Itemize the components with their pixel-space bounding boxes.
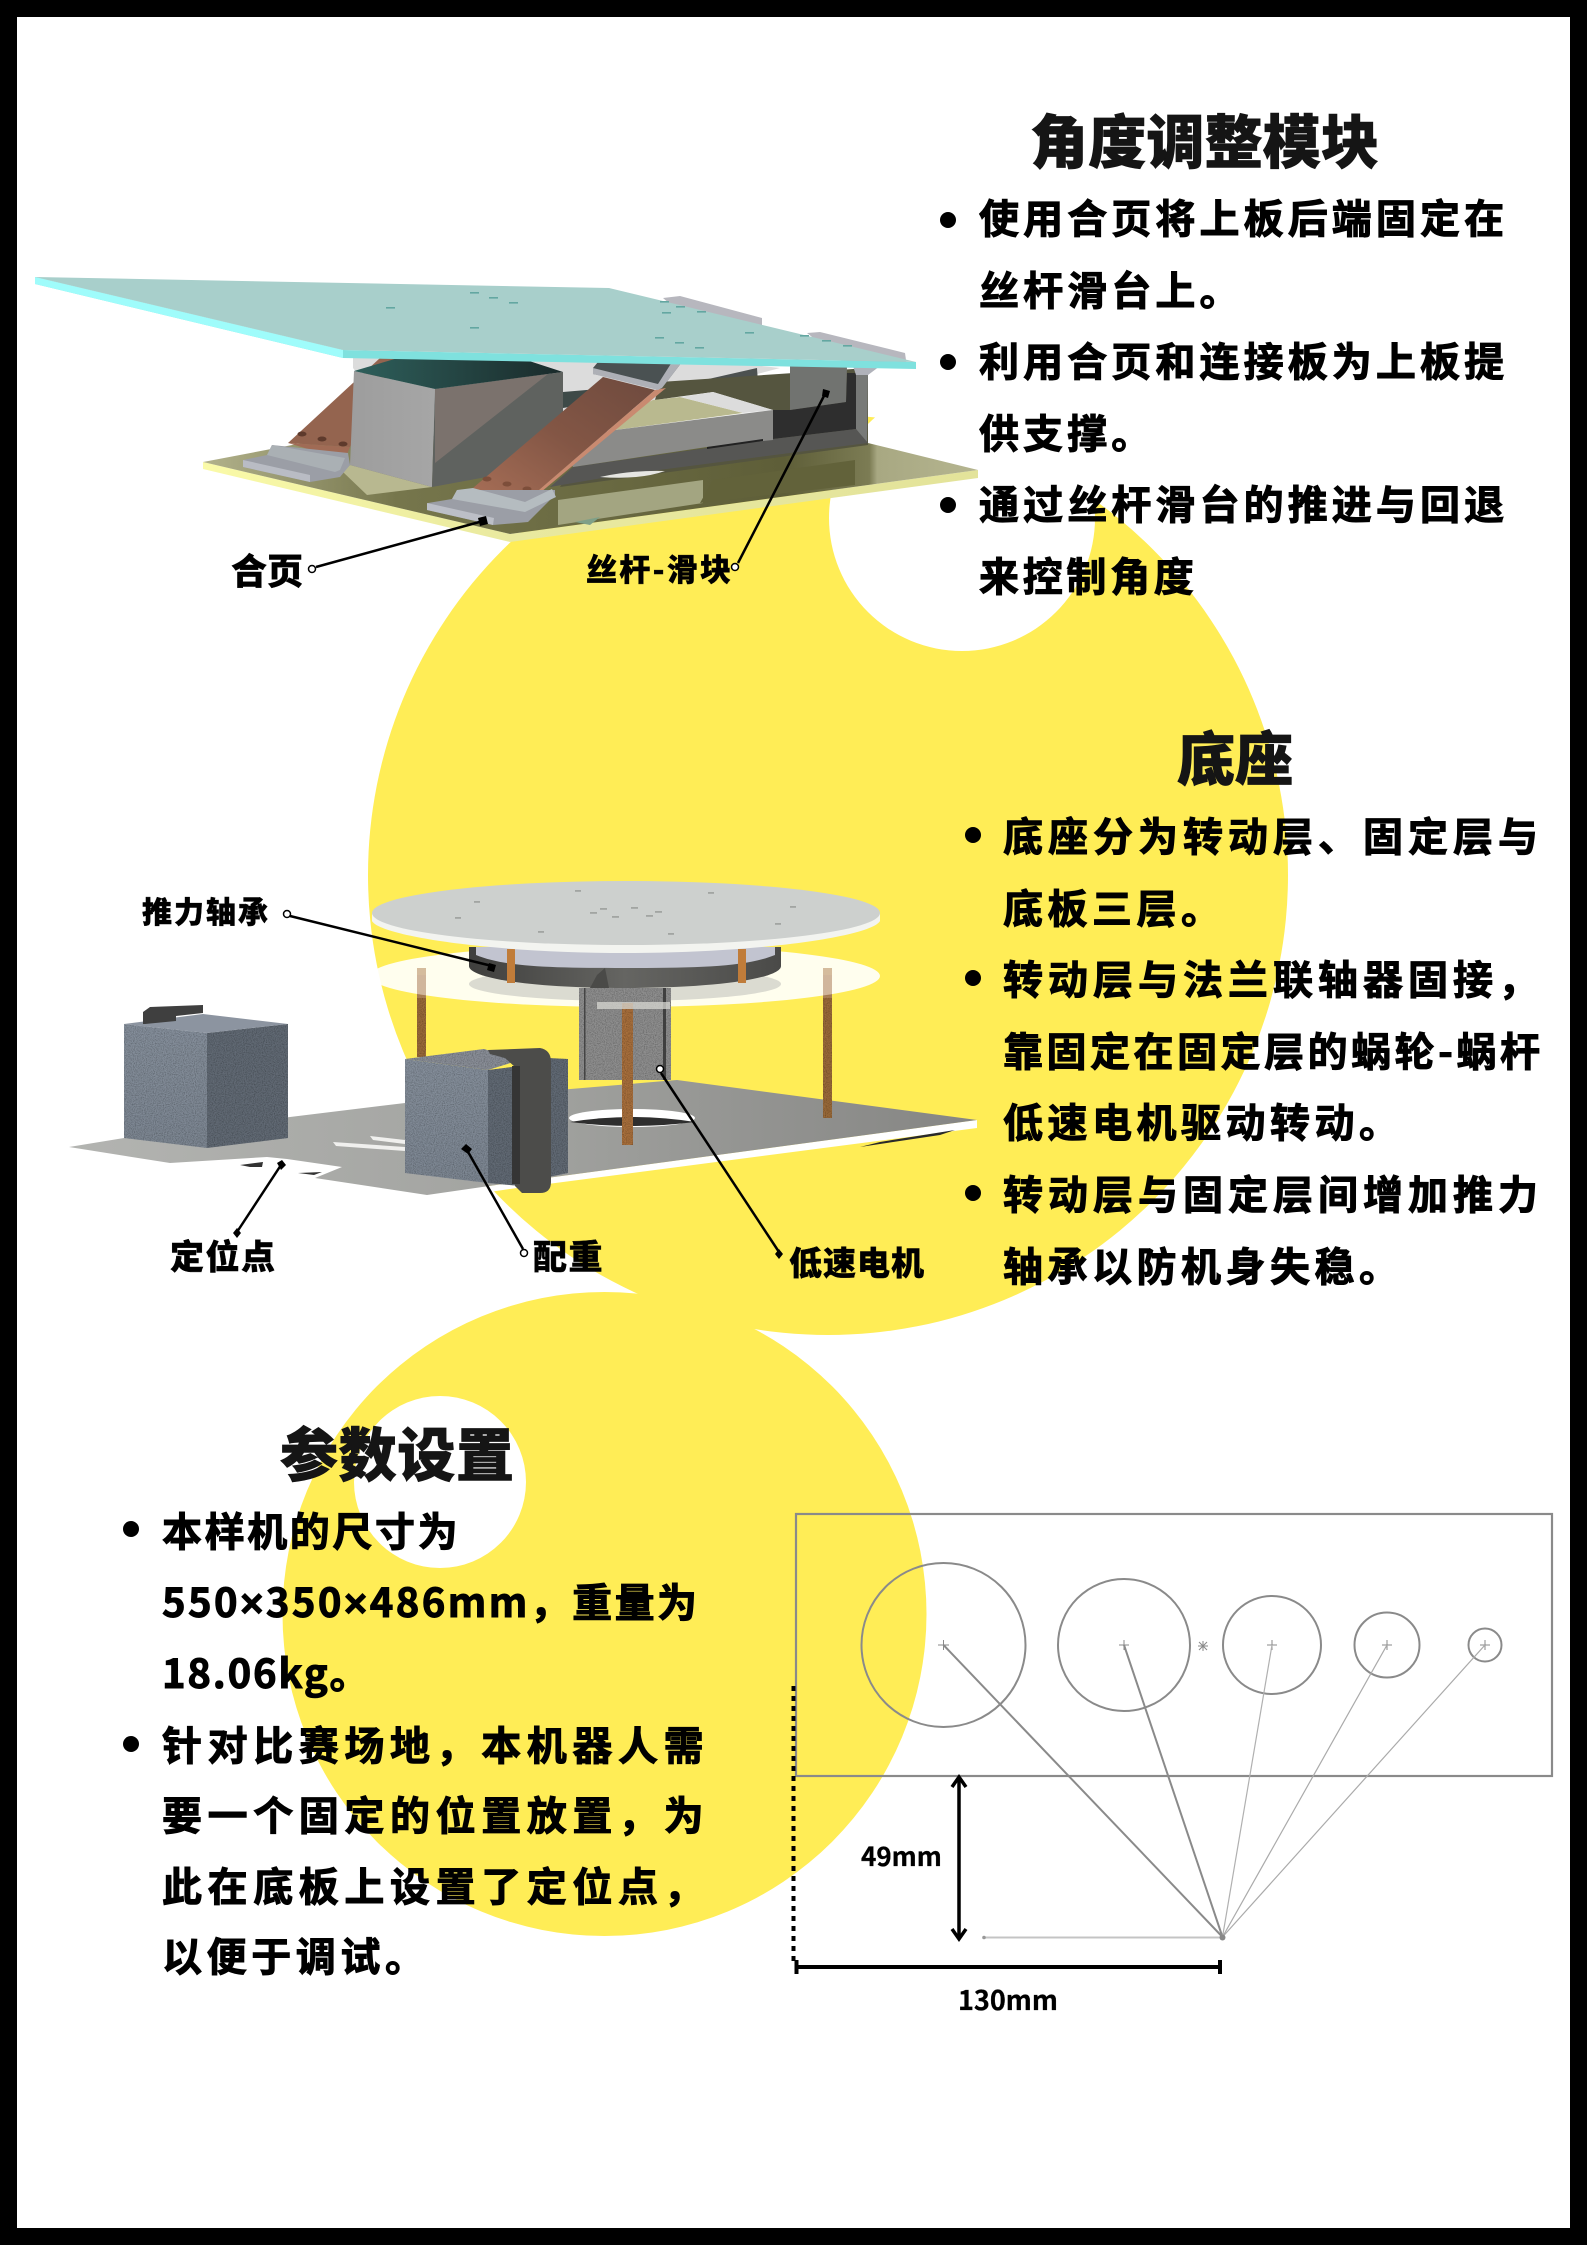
yellow background shape: [282, 385, 1288, 1936]
callout: hinge: [231, 516, 488, 595]
text block: parameter bullets: 550×350×486mm，重量为: [162, 1571, 697, 1629]
rear copper strip: [288, 358, 397, 459]
callout: lead screw slider: 丝杆-滑块: [586, 545, 731, 590]
gray box: [350, 358, 563, 487]
text block: angle module bullets: 来控制角度: [979, 545, 1198, 603]
callout: low speed motor: [656, 1066, 925, 1285]
text block: base bullets: 底座分为转动层、固定层与: [1003, 805, 1543, 863]
callout: lead screw slider: [586, 389, 830, 590]
title: base: 底座: [1177, 713, 1293, 797]
rear rods: [417, 975, 832, 1118]
front rod: [597, 1002, 670, 1145]
text block: parameter bullets: [123, 1500, 709, 1983]
text block: angle module bullets: 利用合页和连接板为上板提: [979, 330, 1508, 388]
text block: angle module bullets: 使用合页将上板后端固定在: [979, 187, 1508, 245]
counterweight: front: [405, 1048, 568, 1193]
callout: counterweight: 配重: [533, 1230, 604, 1279]
callout: thrust bearing: [142, 888, 496, 972]
callout: hinge: 合页: [231, 543, 303, 595]
text block: parameter bullets: 针对比赛场地，本机器人需: [162, 1714, 709, 1772]
text block: base bullets: 靠固定在固定层的蜗轮-蜗杆: [1003, 1020, 1540, 1078]
rear hinge: [243, 445, 350, 482]
text block: parameter bullets: 要一个固定的位置放置，为: [162, 1784, 709, 1842]
text block: base bullets: 转动层与固定层间增加推力: [1003, 1163, 1543, 1221]
callout: low speed motor: 低速电机: [789, 1237, 925, 1285]
callout: locating point: 定位点: [170, 1230, 276, 1279]
text block: angle module bullets: [940, 187, 1508, 603]
text block: angle module bullets: 通过丝杆滑台的推进与回退: [979, 473, 1508, 531]
text block: base bullets: [965, 805, 1543, 1293]
motor: [579, 988, 671, 1080]
base plate: [69, 1080, 977, 1201]
chart: sketch of circles and dimensions: [794, 1514, 1552, 2018]
lower plate: [203, 435, 978, 542]
text block: base bullets: 底板三层。: [1003, 877, 1226, 935]
text block: parameter bullets: 本样机的尺寸为: [162, 1500, 460, 1558]
chart: sketch of circles and dimensions: 130mm: [958, 1979, 1058, 2018]
title: angle module: 角度调整模块: [1030, 96, 1379, 180]
text block: angle module bullets: 供支撑。: [979, 402, 1155, 460]
thrust bearing: [469, 947, 781, 988]
text block: base bullets: 转动层与法兰联轴器固接，: [1003, 948, 1543, 1006]
upper disc: [372, 881, 880, 953]
mechanism behind: [353, 358, 868, 487]
text block: angle module bullets: 丝杆滑台上。: [979, 259, 1244, 317]
illustration: angle adjustment module: [35, 277, 978, 542]
front copper strip: [473, 362, 682, 502]
lower translucent disc: [370, 945, 880, 1007]
callout: counterweight: [461, 1144, 604, 1279]
title: parameters: 参数设置: [280, 1409, 514, 1493]
text block: parameter bullets: 此在底板上设置了定位点，: [162, 1855, 709, 1913]
text block: parameter bullets: 18.06kg。: [162, 1642, 371, 1700]
front hinge: [427, 488, 556, 525]
chart: sketch of circles and dimensions: 49mm: [861, 1837, 942, 1874]
text block: base bullets: 低速电机驱动转动。: [1003, 1091, 1404, 1149]
callout: thrust bearing: 推力轴承: [142, 888, 270, 932]
callout: locating point: [170, 1160, 286, 1279]
text block: parameter bullets: 以便于调试。: [162, 1925, 430, 1983]
counterweight: left: [124, 1005, 288, 1148]
text block: base bullets: 轴承以防机身失稳。: [1003, 1235, 1404, 1293]
hinge tabs and upper plate: [35, 277, 916, 375]
illustration: base assembly: [69, 881, 977, 1201]
